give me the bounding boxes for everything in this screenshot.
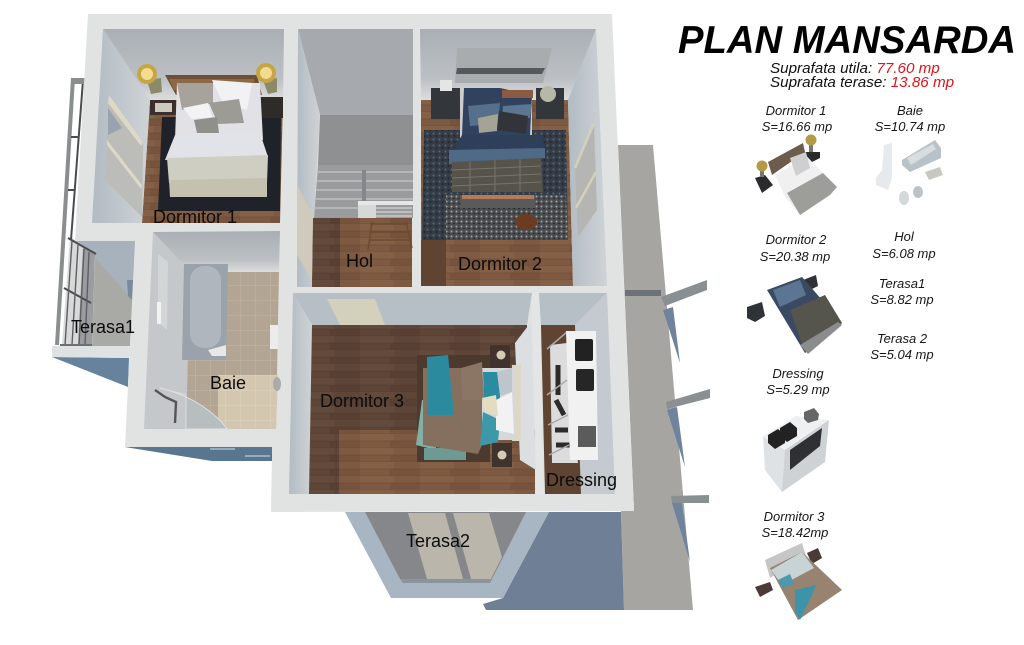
room labels: Dormitor 1 bbox=[153, 207, 237, 227]
legend: Baie bbox=[875, 103, 945, 205]
nightstands bbox=[431, 88, 460, 119]
summary surfaces: Suprafata terase: 13.86 mp bbox=[770, 74, 954, 91]
bath tub bbox=[182, 264, 228, 360]
bed bbox=[512, 365, 521, 441]
legend: Terasa 2: Terasa 2 bbox=[877, 331, 928, 346]
window bbox=[105, 95, 143, 217]
room: Dressing bbox=[539, 293, 615, 494]
room: Dormitor 2 bbox=[420, 29, 607, 286]
icon: wardrobe bbox=[762, 408, 829, 492]
icon: bathroom fixtures bbox=[876, 140, 943, 205]
window bbox=[158, 254, 168, 330]
room labels: Dormitor 3 bbox=[320, 391, 404, 411]
roof behind house bbox=[483, 145, 693, 610]
legend: Dormitor 3: S=18.42mp bbox=[762, 525, 828, 540]
icon: bed 1 bbox=[755, 134, 837, 215]
room: Dormitor 1 bbox=[92, 29, 284, 223]
legend: Dressing: S=5.29 mp bbox=[766, 382, 830, 397]
title: PLAN MANSARDA bbox=[678, 19, 1016, 62]
legend: Dressing bbox=[762, 366, 830, 492]
rug bbox=[158, 117, 281, 211]
nightstands bbox=[490, 345, 510, 369]
rug bbox=[417, 355, 490, 462]
terrace 1 bbox=[52, 78, 136, 387]
divider wall bbox=[532, 293, 544, 511]
legend: Dormitor 2: Dormitor 2 bbox=[766, 232, 827, 247]
legend: Hol bbox=[872, 229, 936, 261]
legend: Dormitor 3 bbox=[755, 509, 842, 620]
legend: Terasa1 bbox=[870, 276, 934, 307]
terrace 2 bbox=[345, 512, 549, 598]
room labels: Dressing bbox=[546, 470, 617, 490]
bed bbox=[460, 90, 532, 138]
legend: Hol: S=6.08 mp bbox=[872, 246, 936, 261]
shower bbox=[155, 388, 227, 429]
headboard bbox=[165, 75, 262, 95]
legend: Hol: Hol bbox=[894, 229, 915, 244]
legend: Baie: S=10.74 mp bbox=[875, 119, 945, 134]
room labels: Terasa2 bbox=[406, 531, 470, 551]
room labels: Dormitor 2 bbox=[458, 254, 542, 274]
legend: Dormitor 2: S=20.38 mp bbox=[760, 249, 830, 264]
rug bbox=[422, 130, 568, 240]
legend: Dressing: Dressing bbox=[772, 366, 824, 381]
room labels: Terasa1 bbox=[71, 317, 135, 337]
legend: Dormitor 3: Dormitor 3 bbox=[764, 509, 825, 524]
room: Hol bbox=[297, 29, 413, 287]
room: Dormitor 3 bbox=[289, 293, 544, 511]
room labels: Baie bbox=[210, 373, 246, 393]
summary surfaces bbox=[770, 60, 954, 91]
icon: bed 2 bbox=[747, 275, 842, 354]
legend: Dormitor 1 bbox=[755, 103, 837, 215]
bed bbox=[175, 83, 263, 140]
icon: bed 3 bbox=[755, 543, 842, 620]
nightstands bbox=[150, 100, 176, 115]
legend: Baie: Baie bbox=[897, 103, 923, 118]
legend: Dormitor 2 bbox=[747, 232, 842, 354]
legend: Terasa1: S=8.82 mp bbox=[870, 292, 934, 307]
lamps bbox=[147, 78, 162, 94]
room labels: Hol bbox=[346, 251, 373, 271]
railing bbox=[57, 78, 96, 345]
wall art bbox=[455, 48, 552, 83]
door bbox=[327, 299, 385, 325]
house shell walls bbox=[75, 14, 634, 512]
room labels bbox=[71, 207, 617, 551]
room: Baie bbox=[144, 231, 281, 429]
legend: Dormitor 1: Dormitor 1 bbox=[766, 103, 826, 118]
legend: Terasa 2: S=5.04 mp bbox=[870, 347, 934, 362]
legend: Terasa 2 bbox=[870, 331, 934, 362]
window bbox=[575, 123, 597, 237]
summary surfaces: Suprafata utila: 77.60 mp bbox=[770, 60, 940, 77]
legend: Dormitor 1: S=16.66 mp bbox=[762, 119, 832, 134]
legend: Terasa1: Terasa1 bbox=[879, 276, 925, 291]
roof beams and shadows bbox=[661, 280, 710, 562]
